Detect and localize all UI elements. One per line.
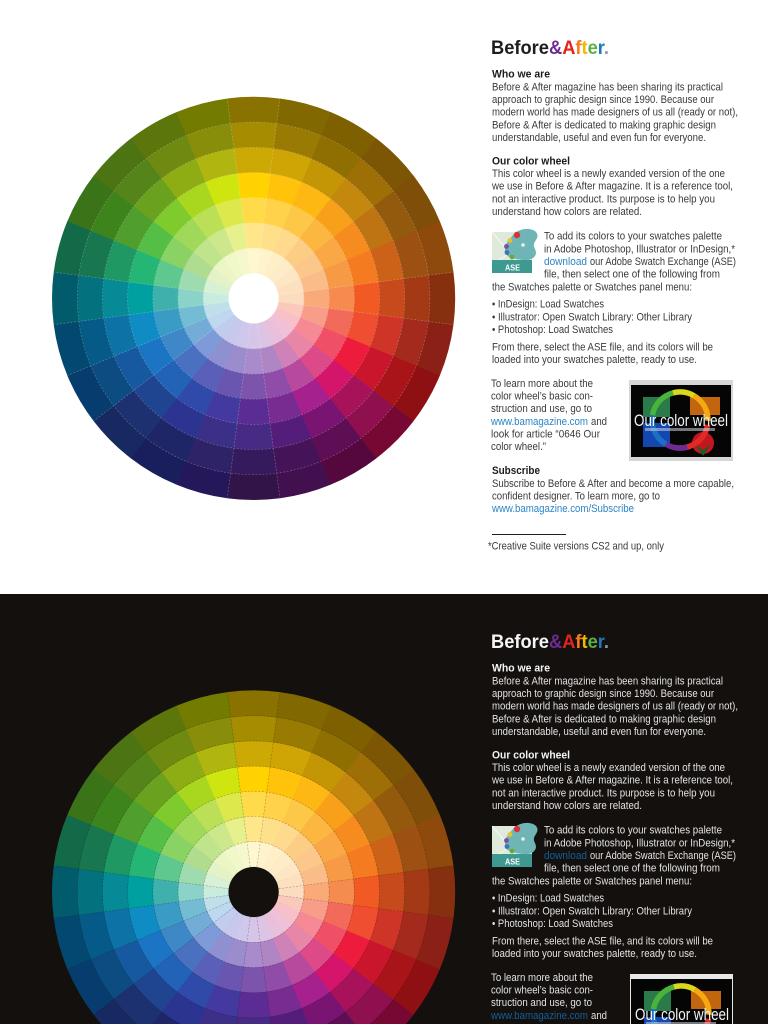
text block: who we are: Before & After is dedicated to making graphic design [492,119,716,131]
text block: our color wheel: This color wheel is a newly exanded version of the one [492,168,725,180]
text block: add swatches instructions (dark): download [544,850,587,862]
list: load swatches menu paths (dark): • Photoshop: Load Swatches [492,918,613,930]
text block: add swatches instructions: To add its colors to your swatches palette [544,231,722,243]
text block: subscribe [491,465,734,515]
text block: who we are: Before & After magazine has been sharing its practical [492,81,723,93]
text block: from there (dark): From there, select the ASE file, and its colors will be [492,936,713,948]
panel: black page [0,594,768,1024]
color wheel, dark version [52,690,456,1024]
icon: ASE palette file (dark) [492,823,538,867]
text block: add swatches instructions (dark): the Swatches palette or Swatches panel menu: [492,875,692,887]
text block: who we are (dark): approach to graphic design since 1990. Because our [492,688,714,700]
text block: add swatches instructions: the Swatches palette or Swatches panel menu: [492,281,692,293]
color wheel, light version [0,34,518,563]
text block: learn more: color wheel’s basic con- [491,390,593,402]
text block: learn more: www.bamagazine.com [490,416,588,428]
text block: learn more (dark): struction and use, go to [491,997,592,1009]
text block: who we are (dark): modern world has made designers of us all (ready or not), [492,701,738,713]
text block: our color wheel: understand how colors are related. [492,206,642,218]
text block: learn more: color wheel.” [491,441,546,453]
text block: who we are: modern world has made designers of us all (ready or not), [492,107,738,119]
text block: learn more [490,378,607,453]
text block: learn more: struction and use, go to [491,403,592,415]
text block: learn more (dark): To learn more about the [491,972,593,984]
text block: who we are (dark) [492,663,738,738]
footnote: *Creative Suite versions CS2 and up, only [488,541,664,553]
text block: our color wheel: Our color wheel [492,155,570,167]
text block: who we are (dark): Who we are [492,663,550,675]
text block: add swatches instructions (dark): file, then select one of the following from [544,863,720,875]
text block: subscribe: Subscribe [492,465,540,477]
text block: add swatches instructions: in Adobe Photoshop, Illustrator or InDesign,* [544,243,736,255]
text block: learn more (dark): and [591,1010,607,1022]
text block: subscribe: www.bamagazine.com/Subscribe [491,503,634,515]
text block: subscribe: confident designer. To learn more, go to [492,491,660,503]
text block: our color wheel (dark): Our color wheel [492,749,570,761]
list: load swatches menu paths: • InDesign: Load Swatches [492,299,604,311]
text block: from there: From there, select the ASE file, and its colors will be [492,342,713,354]
text block: who we are (dark): Before & After is dedicated to making graphic design [492,713,716,725]
text block: from there: loaded into your swatches palette, ready to use. [492,354,697,366]
text block: our color wheel (dark) [491,749,733,812]
text block: add swatches instructions: download [544,256,587,268]
text block: our color wheel [491,155,733,218]
text block: learn more (dark): www.bamagazine.com [490,1010,588,1022]
list: load swatches menu paths [492,299,692,336]
text block: our color wheel: not an interactive product. Its purpose is to help you [492,193,715,205]
text block: our color wheel (dark): understand how colors are related. [492,800,642,812]
text block: from there [492,342,713,366]
text block: our color wheel: we use in Before & After magazine. It is a reference tool, [491,181,733,193]
text block: learn more (dark): color wheel’s basic con- [491,984,593,996]
text block: add swatches instructions [492,231,736,293]
text block: who we are: Who we are [492,69,550,81]
thumbnail: Our color wheel article (dark) [630,974,733,1024]
list: load swatches menu paths (dark) [492,893,692,930]
text block: subscribe: Subscribe to Before & After and become a more capable, [492,478,734,490]
text block: add swatches instructions (dark) [492,825,736,887]
list: load swatches menu paths: • Illustrator: Open Swatch Library: Other Library [492,311,692,323]
text block: add swatches instructions: our Adobe Swatch Exchange (ASE) [590,256,736,268]
text block: learn more: To learn more about the [491,378,593,390]
thumbnail: Our color wheel article [629,380,733,461]
thumbnail: Our color wheel article: Our color wheel [634,411,728,430]
text block: who we are [492,69,738,144]
text block: our color wheel (dark): we use in Before & After magazine. It is a reference tool, [491,775,733,787]
text block: learn more: look for article “0646 Our [491,428,600,440]
text block: who we are (dark): understandable, useful and even fun for everyone. [492,726,706,738]
text block: who we are: understandable, useful and even fun for everyone. [492,132,706,144]
text block: who we are (dark): Before & After magazine has been sharing its practical [492,675,723,687]
text block: who we are: approach to graphic design since 1990. Because our [492,94,714,106]
text block: learn more: and [591,416,607,428]
logo: Before & After (reversed): Before&After. [491,632,609,653]
text block: learn more (dark) [490,972,607,1022]
text block: our color wheel (dark): This color wheel is a newly exanded version of the one [492,762,725,774]
logo: Before & After: Before&After. [491,38,609,59]
text block: add swatches instructions (dark): in Adobe Photoshop, Illustrator or InDesign,* [544,837,736,849]
text block: from there (dark) [492,936,713,960]
text block: add swatches instructions (dark): our Adobe Swatch Exchange (ASE) [590,850,736,862]
list: load swatches menu paths (dark): • Illustrator: Open Swatch Library: Other Library [492,905,692,917]
icon: ASE palette file [492,229,538,273]
text block: from there (dark): loaded into your swatches palette, ready to use. [492,948,697,960]
list: load swatches menu paths: • Photoshop: Load Swatches [492,324,613,336]
text block: add swatches instructions: file, then select one of the following from [544,269,720,281]
text block: add swatches instructions (dark): To add its colors to your swatches palette [544,825,722,837]
panel: white page [0,0,768,594]
text block: our color wheel (dark): not an interactive product. Its purpose is to help you [492,787,715,799]
list: load swatches menu paths (dark): • InDesign: Load Swatches [492,893,604,905]
